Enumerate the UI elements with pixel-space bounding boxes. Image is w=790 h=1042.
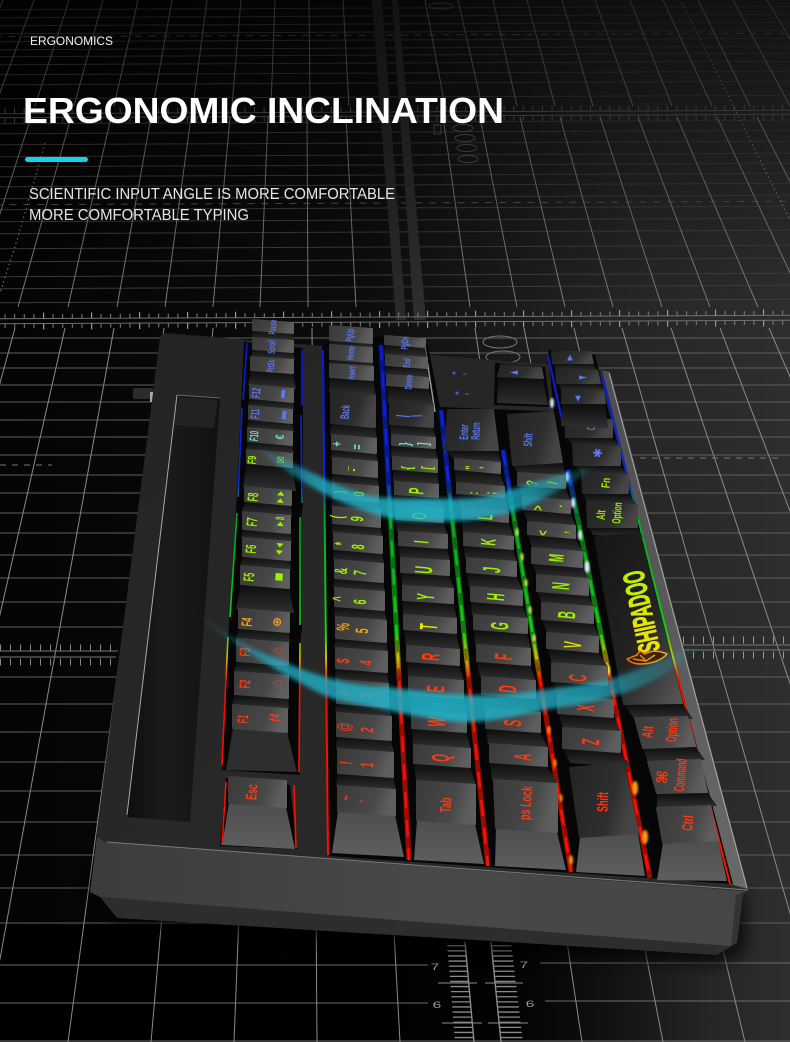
shift row legends: M <box>545 553 569 563</box>
number row legends: 1 <box>358 762 378 768</box>
QWERTY row legends: Delete <box>403 374 415 390</box>
airflow wave: lower <box>185 605 703 722</box>
number row legends: 8 <box>349 544 369 550</box>
keyboard drop shadow <box>90 860 745 965</box>
modifier legends: Alt <box>595 509 609 520</box>
number row legends: ^ <box>330 595 350 603</box>
home row legends: S <box>500 718 528 728</box>
function row legends: ►‖ <box>274 516 288 528</box>
function row legends: F11 <box>249 408 263 420</box>
right rim <box>602 370 748 889</box>
function row legends <box>234 319 290 801</box>
modifier legends: ⌘ <box>654 769 672 785</box>
QWERTY row legends: \ <box>408 414 426 418</box>
number row legends: $ <box>334 658 354 664</box>
function row legends: Esc <box>243 783 261 801</box>
function row legends: ⌂ <box>268 646 286 654</box>
home row legends <box>458 422 538 821</box>
home row legends: ' <box>476 466 494 470</box>
number row legends: 2 <box>358 727 378 733</box>
bottom double ruler: 6 <box>526 998 534 1009</box>
shift row legends: V <box>560 640 588 650</box>
function row legends: ►► <box>274 489 288 505</box>
modifier legends: Alt <box>639 725 657 739</box>
home row legends: G <box>487 621 515 631</box>
key column: modifiers and spacebar <box>565 418 727 881</box>
function row legends: ✉ <box>275 456 289 464</box>
modifier legends: Option <box>662 717 682 743</box>
QWERTY row legends: { <box>398 465 416 470</box>
function row legends: PrtSc <box>265 359 277 373</box>
number row legends: 9 <box>348 516 368 522</box>
function row legends: F3 <box>236 647 254 657</box>
number row legends: Insert <box>346 366 358 380</box>
QWERTY row legends: Q <box>428 753 456 763</box>
number row legends: ! <box>337 761 357 765</box>
function row legends: ⌂ <box>267 679 285 687</box>
function row legends: ▬ <box>276 410 290 420</box>
key column: number row <box>328 326 404 857</box>
LED bright spots <box>516 398 648 865</box>
home row legends: F <box>491 653 519 661</box>
number row legends: ` <box>358 800 378 804</box>
number row legends: Back <box>338 404 354 420</box>
home row legends: : <box>464 491 482 495</box>
QWERTY row legends: Y <box>413 592 441 602</box>
function row legends: F9 <box>246 455 260 465</box>
shift row legends: < <box>534 530 552 536</box>
number row legends: % <box>334 622 354 632</box>
QWERTY row legends: End <box>401 358 413 368</box>
number row legends: + <box>328 441 346 447</box>
subtitle: SCIENTIFIC INPUT ANGLE IS MORE COMFORTABLE <box>29 186 395 203</box>
subtitle <box>29 186 395 224</box>
function row legends: F8 <box>244 492 262 502</box>
key wells <box>220 336 733 884</box>
shift row legends: Shift <box>521 432 537 447</box>
function row legends: F2 <box>236 679 254 689</box>
function row legends: ▬ <box>275 389 289 399</box>
number row legends: ( <box>328 514 348 519</box>
modifier legends: Fn <box>600 477 614 489</box>
function row legends: F6 <box>242 544 260 554</box>
QWERTY row legends: T <box>416 623 444 631</box>
cable stub <box>133 388 153 402</box>
arrow keys: ▼ <box>573 394 583 404</box>
QWERTY row legends: ] <box>414 442 432 446</box>
QWERTY row legends: I <box>410 540 434 544</box>
function row legends: F5 <box>240 572 258 582</box>
function row legends: F7 <box>243 517 261 527</box>
arrow keys: ► <box>577 374 589 382</box>
shift row legends: B <box>554 610 582 620</box>
number row legends: * <box>332 541 352 547</box>
number row legends: _ <box>333 465 351 472</box>
shift row legends: N <box>548 581 576 591</box>
home row legends: J <box>479 566 507 574</box>
spacebar <box>595 534 682 704</box>
bottom double ruler: 6 <box>433 999 441 1010</box>
number row legends: 6 <box>351 599 371 605</box>
modifier legends: Command <box>671 758 691 792</box>
number row legends <box>328 328 378 804</box>
QWERTY row legends: O <box>408 511 432 521</box>
QWERTY row legends: PgDn <box>399 336 411 350</box>
key column: QWERTY row <box>384 336 484 864</box>
function row legends: ƒ4 <box>266 713 284 723</box>
modifier legends: ✱ <box>591 447 605 459</box>
home row legends: L <box>474 513 498 521</box>
subtitle: MORE COMFORTABLE TYPING <box>29 207 249 224</box>
bottom double ruler: 7 <box>431 961 439 972</box>
key column: function row <box>222 319 297 849</box>
home row legends: Enter <box>458 424 472 440</box>
QWERTY row legends: } <box>396 441 414 446</box>
QWERTY row legends <box>393 336 456 813</box>
bottom double ruler: 7 <box>520 959 528 970</box>
shift row legends <box>521 432 612 812</box>
modifier legends <box>585 419 697 831</box>
shift row legends: X <box>573 703 601 713</box>
arrow keys <box>497 352 608 428</box>
home row legends: A <box>510 752 538 762</box>
home row legends: D <box>495 684 523 694</box>
number row legends: PgUp <box>344 328 356 342</box>
home row legends: Return <box>469 422 483 440</box>
shift row legends: . <box>548 504 566 508</box>
case top plate <box>97 333 748 891</box>
case front corner <box>731 890 748 946</box>
function row legends: Scroll <box>266 340 278 354</box>
bottom double ruler <box>431 940 534 1042</box>
home row legends: ps Lock <box>516 785 536 821</box>
case underside <box>100 897 737 955</box>
function row legends: ■ <box>270 572 288 582</box>
function row legends: € <box>274 434 288 440</box>
modifier legends: Option <box>610 502 626 524</box>
number row legends: = <box>348 444 366 450</box>
modifier legends: Ctrl <box>585 419 599 431</box>
number row legends: 7 <box>351 570 371 576</box>
function row legends: ◄◄ <box>273 541 287 557</box>
shift row legends: Shift <box>594 792 612 812</box>
number row legends: & <box>332 567 352 575</box>
number row legends: - <box>344 468 362 472</box>
QWERTY row legends: Tab <box>437 796 455 813</box>
number row legends: ) <box>331 490 349 494</box>
number row legends: 5 <box>353 628 373 634</box>
function row legends: F4 <box>238 617 256 627</box>
function row legends: F1 <box>234 714 252 724</box>
number row legends: Home <box>345 345 357 360</box>
number row legends: # <box>335 690 355 696</box>
QWERTY row legends: E <box>423 684 451 694</box>
title: ERGONOMIC INCLINATION <box>23 90 504 131</box>
home row legends: K <box>477 537 501 546</box>
QWERTY row legends: [ <box>418 466 436 470</box>
QWERTY row legends: U <box>411 565 439 575</box>
number row legends: 0 <box>350 491 368 497</box>
shift row legends: / <box>544 481 562 485</box>
shift row legends: C <box>565 673 593 683</box>
spacebar logo: SHIPADOO: SHIPADOO <box>617 567 667 655</box>
QWERTY row legends: | <box>393 414 411 418</box>
modifier legends: Ctrl <box>679 815 697 831</box>
QWERTY row legends: R <box>418 652 446 662</box>
shift row legends: , <box>553 530 571 534</box>
shift row legends: ? <box>523 480 541 486</box>
keyboard: casing and keys <box>90 319 748 965</box>
QWERTY row legends: W <box>424 716 452 728</box>
function row legends: ⊕ <box>270 616 284 628</box>
front edge highlight <box>107 842 748 890</box>
key column: shift row <box>508 412 645 876</box>
QWERTY row legends: P <box>405 487 429 495</box>
function row legends: F12 <box>250 387 264 399</box>
arrow keys: ◄ <box>508 369 520 377</box>
shift row legends: Z <box>578 738 606 746</box>
home row legends: " <box>462 465 480 471</box>
function row legends: F10 <box>248 430 262 442</box>
key column: home row <box>445 410 566 870</box>
home row legends: H <box>483 592 511 602</box>
airflow wave: upper <box>253 445 600 521</box>
number row legends: ~ <box>337 794 357 802</box>
arrow keys: ▲ <box>565 352 575 364</box>
function row legends: Pause <box>267 319 279 335</box>
case front face <box>90 836 748 946</box>
indicator LEDs <box>452 372 469 395</box>
number row legends: @ <box>335 722 355 732</box>
shift row legends: > <box>529 505 547 511</box>
home row legends: ; <box>481 491 499 495</box>
accent bar <box>25 157 88 162</box>
number row legends: 4 <box>357 660 377 666</box>
RGB backlight strips <box>222 343 730 884</box>
cable slot <box>127 395 220 822</box>
number row legends: 3 <box>357 693 377 699</box>
eyebrow label: ERGONOMICS <box>30 34 113 48</box>
